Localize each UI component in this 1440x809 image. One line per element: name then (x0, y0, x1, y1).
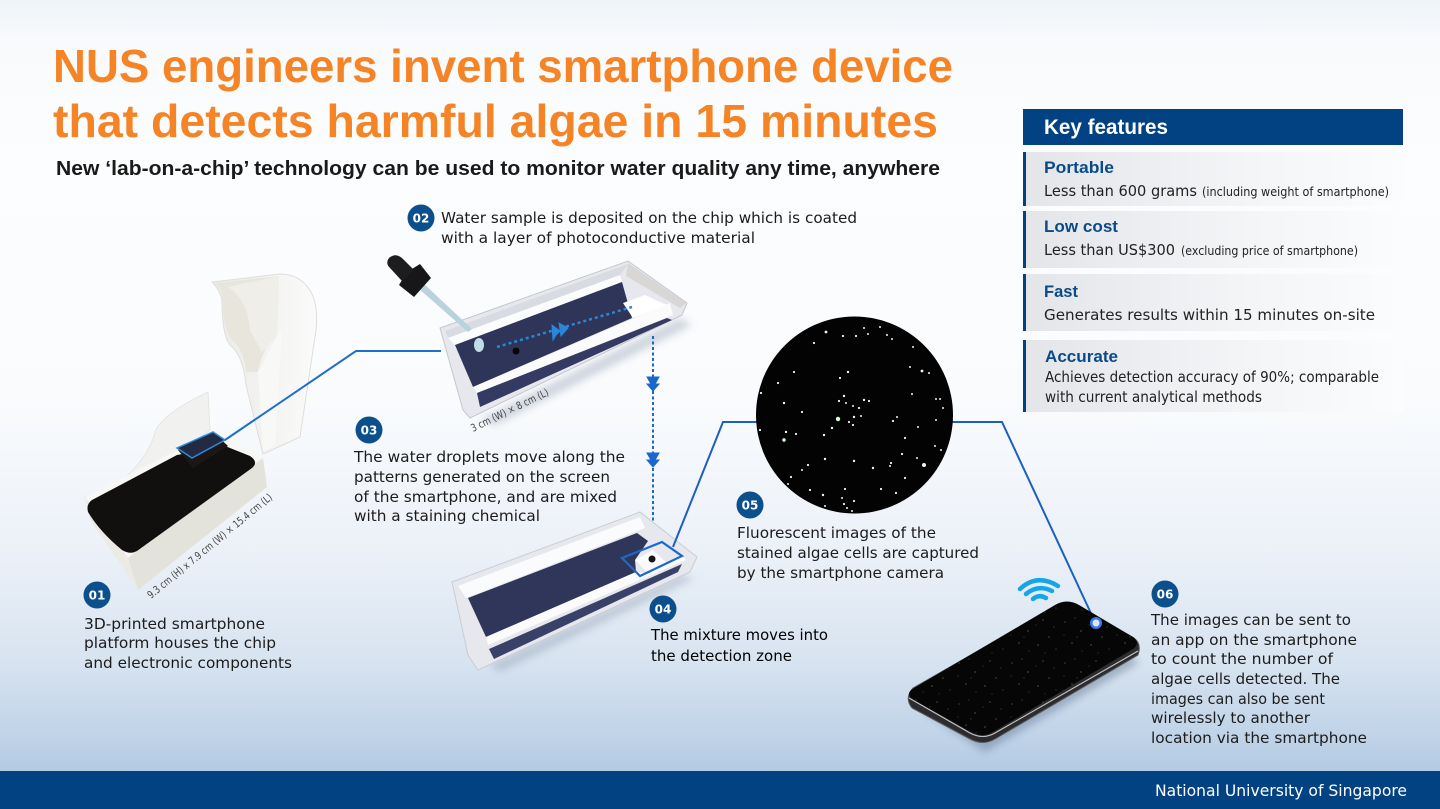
platform lid (212, 274, 317, 454)
badge 01: 01 (89, 588, 105, 602)
badge 06: 06 (1157, 588, 1173, 602)
text 02 (441, 209, 857, 247)
badge 01 (84, 582, 110, 608)
feature: fast: Fast (1044, 282, 1078, 301)
subtitle: New ‘lab-on-a-chip’ technology can be used to monitor water quality any time, anywhere (56, 158, 940, 180)
platform base (85, 430, 263, 558)
text 03: The water droplets move along the (353, 448, 625, 466)
text 06: wirelessly to another (1151, 709, 1311, 727)
phone screen (909, 602, 1137, 735)
key features header: Key features (1044, 116, 1168, 139)
chip lower strip (486, 556, 686, 645)
detection square (635, 550, 667, 573)
step 05 (736, 492, 979, 582)
text 01: platform houses the chip (84, 634, 276, 652)
connector: microscope image to phone (950, 422, 1095, 622)
dimension label: chip: 3 cm (W) × 8 cm (L) (469, 387, 551, 435)
water droplet (474, 338, 484, 352)
title: NUS engineers invent smartphone device (53, 40, 953, 92)
feature: accurate: Accurate (1045, 347, 1118, 366)
text 06: an app on the smartphone (1151, 631, 1357, 649)
step 01 (84, 582, 292, 672)
footer: National University of Singapore (1155, 781, 1407, 800)
step 06 (1150, 580, 1367, 747)
feature: portable: Less than 600 grams (1044, 182, 1197, 200)
feature: fast (1023, 274, 1403, 331)
chip shadow (480, 318, 692, 425)
badge 05 (736, 492, 764, 518)
badge 03: 03 (361, 424, 377, 438)
feature: portable (1023, 152, 1403, 206)
chip acrylic end (626, 263, 686, 308)
badge 06 (1152, 580, 1178, 608)
badge 02: 02 (413, 212, 429, 226)
detection zone highlight (622, 542, 682, 576)
step 02 (408, 204, 857, 247)
connector: chip to microscope image (673, 422, 760, 547)
title (53, 40, 953, 147)
connector: platform to chip (225, 351, 441, 440)
step 04 (650, 596, 828, 665)
text 04 (650, 626, 828, 665)
phone body (908, 604, 1139, 742)
smartphone with results (908, 602, 1140, 752)
text 03: with a staining chemical (354, 507, 540, 525)
badge 04: 04 (655, 602, 671, 616)
feature: accurate: with current analytical methods (1045, 388, 1262, 406)
text 02: Water sample is deposited on the chip which is coated (441, 209, 857, 227)
icon: wifi (1020, 580, 1058, 599)
text 03: of the smartphone, and are mixed (354, 488, 617, 506)
badge 03 (356, 416, 382, 444)
badge 02 (408, 204, 434, 232)
vertical dotted arrow (647, 336, 659, 540)
feature: fast: Generates results within 15 minutes on-site (1044, 306, 1375, 324)
smartphone platform illustration (85, 274, 317, 590)
text 03 (353, 448, 625, 525)
algae dot (512, 348, 520, 354)
badge 05: 05 (742, 498, 758, 512)
feature: low cost (1023, 211, 1403, 268)
chip dark surface (455, 282, 632, 387)
text 06: The images can be sent to (1150, 611, 1351, 629)
text 05: stained algae cells are captured (737, 544, 979, 562)
feature: accurate (1023, 340, 1403, 412)
phone silver edge (909, 651, 1138, 736)
feature: portable: (including weight of smartphone) (1202, 185, 1389, 199)
platform phone (88, 446, 255, 553)
text 05: by the smartphone camera (737, 564, 944, 582)
text 01: 3D-printed smartphone (84, 615, 265, 633)
dropper (387, 255, 472, 332)
flow path arrow (497, 307, 632, 347)
title: that detects harmful algae in 15 minutes (53, 95, 938, 147)
chip shadow (490, 575, 695, 672)
text 01 (84, 615, 292, 672)
text 06 (1150, 611, 1367, 747)
text 06: location via the smartphone (1151, 729, 1367, 747)
phone shadow (925, 625, 1140, 752)
chip with detection zone (452, 512, 697, 672)
feature: low cost: (excluding price of smartphone) (1181, 244, 1358, 258)
badge 04 (650, 596, 676, 622)
fluorescent algae image (756, 316, 953, 514)
platform back wall (85, 392, 210, 500)
chip with water droplet (387, 255, 692, 425)
text 02: with a layer of photoconductive material (441, 229, 755, 247)
text 06: algae cells detected. The (1151, 670, 1340, 688)
panel: key features (1023, 109, 1403, 412)
chip lower strip (473, 303, 673, 393)
text 05 (737, 524, 979, 582)
text 05: Fluorescent images of the (737, 524, 936, 542)
text 06: to count the number of (1151, 650, 1334, 668)
chip block shadow (178, 432, 228, 468)
highlighted chip on platform (177, 432, 225, 458)
text 04: The mixture moves into (650, 626, 828, 644)
text 03: patterns generated on the screen (354, 468, 610, 486)
chip frame (452, 512, 697, 670)
text 01: and electronic components (84, 654, 292, 672)
phone camera marker (1090, 617, 1102, 629)
key features header (1023, 109, 1403, 145)
chip frame (440, 261, 687, 418)
text 06: images can also be sent (1151, 690, 1325, 708)
footer (0, 771, 1440, 809)
feature: portable: Portable (1044, 158, 1114, 177)
feature: low cost: Low cost (1044, 217, 1118, 236)
step 03 (353, 416, 625, 525)
feature: accurate: Achieves detection accuracy of 90%; comparable (1045, 368, 1379, 386)
text 04: the detection zone (651, 647, 792, 665)
dimension label: platform: 9.3 cm (H) x 7.9 cm (W) × 15.4 cm (L) (145, 492, 275, 601)
feature: low cost: Less than US$300 (1044, 241, 1175, 259)
chip dark surface (468, 533, 648, 637)
